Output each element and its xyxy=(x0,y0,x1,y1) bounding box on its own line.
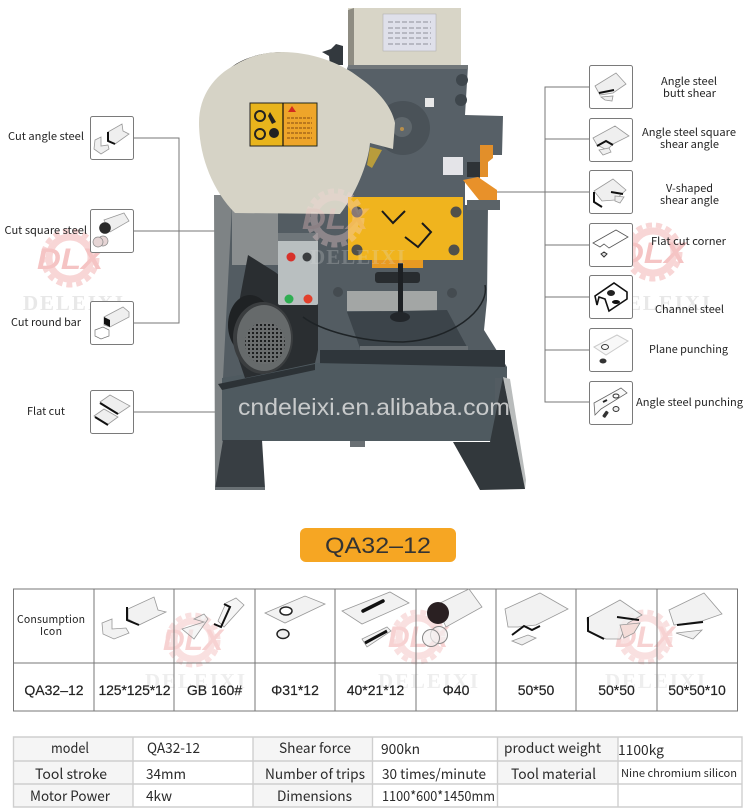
left labels: Cut round bar xyxy=(11,315,82,330)
spec row 1: model xyxy=(51,738,89,758)
right icon: flat cut corner xyxy=(590,224,632,266)
watermark: logo center xyxy=(302,191,370,245)
machine: control box xyxy=(278,233,318,305)
machine: top cover box xyxy=(348,8,461,65)
right icon: angle steel butt shear xyxy=(590,66,632,108)
table icon: V cut xyxy=(587,600,642,639)
machine: base box xyxy=(222,363,507,441)
machine: flywheel flange xyxy=(376,101,430,155)
spec row 2 xyxy=(35,764,737,784)
machine: yellow shear plate xyxy=(348,197,463,268)
spec row 1: Shear force xyxy=(279,738,351,758)
table icon: round bar xyxy=(422,589,482,646)
machine: left foot xyxy=(215,440,265,489)
model badge xyxy=(300,528,456,562)
table values: 50*50 xyxy=(598,682,635,698)
watermark: brand text left: DELEIXI xyxy=(23,291,123,315)
spec row 1: 900kn xyxy=(381,739,420,759)
left icon: cut round bar xyxy=(90,302,134,344)
machine: side guard below disc xyxy=(232,205,278,265)
model badge: QA32–12 xyxy=(325,533,431,558)
table values: Φ31*12 xyxy=(271,682,319,698)
table icon: plate round punch xyxy=(265,596,325,638)
right labels: Angle steel punching xyxy=(636,395,743,410)
machine: punch clamp and rod xyxy=(375,263,420,322)
table icon: angle steel xyxy=(102,597,166,639)
spec row 2: Tool stroke xyxy=(35,764,107,784)
table watermarks: DLX xyxy=(163,624,225,657)
machine: bolts and stickers xyxy=(425,74,468,175)
table values: GB 160# xyxy=(187,682,242,698)
watermark: logo left xyxy=(37,231,105,285)
table header label: Consumption xyxy=(17,612,85,627)
machine: power cable xyxy=(303,285,485,342)
left labels: Cut square steel xyxy=(4,223,87,238)
left labels: Flat cut xyxy=(27,404,65,419)
left icon: flat cut xyxy=(90,390,134,434)
right labels: Angle steel xyxy=(661,74,717,89)
table icon: slot punch xyxy=(342,592,409,647)
right labels: shear angle xyxy=(660,193,719,208)
machine: oil cup xyxy=(322,44,343,65)
table values: 40*21*12 xyxy=(347,682,405,698)
left labels xyxy=(4,129,87,419)
left icon: cut square steel xyxy=(90,210,134,252)
right icon: channel steel xyxy=(590,276,632,318)
table watermarks: DELEIXI xyxy=(378,669,478,693)
right labels: V-shaped xyxy=(666,181,713,196)
spec row 1 xyxy=(51,738,664,760)
right labels xyxy=(636,74,743,410)
spec row 3: 4kw xyxy=(146,786,172,806)
table icon: angle square cut xyxy=(505,593,568,645)
watermark: logo center: DLX xyxy=(302,203,370,236)
right labels: Angle steel square xyxy=(642,125,736,140)
right labels: Plane punching xyxy=(649,342,728,357)
spec row 3: Motor Power xyxy=(30,786,111,806)
right labels: shear angle xyxy=(660,137,719,152)
watermark: logo left: DLX xyxy=(37,243,105,276)
table watermarks: DLX xyxy=(388,621,450,654)
table values xyxy=(24,682,726,698)
consumption table: Icon xyxy=(40,624,62,639)
spec row 3: 1100*600*1450mm xyxy=(382,786,495,806)
connector lines xyxy=(133,87,589,412)
photo watermark url: cndeleixi.en.alibaba.com xyxy=(238,394,510,420)
watermark: brand text center: DELEIXI xyxy=(310,245,405,269)
watermark: logo right: DLX xyxy=(620,237,688,270)
machine: guard disc xyxy=(199,52,395,214)
table icon: butt cut xyxy=(669,593,722,639)
right icon: angle steel square shear angle xyxy=(590,118,632,162)
spec row 3: Dimensions xyxy=(277,786,352,806)
right icon: plane punching xyxy=(590,328,632,372)
right labels: Flat cut corner xyxy=(651,234,727,249)
machine: gear teeth xyxy=(367,147,382,168)
table values: 50*50*10 xyxy=(668,682,726,698)
spec row 2: 34mm xyxy=(146,764,186,784)
watermark: brand text right: DELEIXI xyxy=(610,291,710,315)
table watermarks: DLX xyxy=(615,621,677,654)
spec row 2: Tool material xyxy=(511,764,596,784)
left icon: cut angle steel xyxy=(90,116,134,160)
spec row 1: 1100kg xyxy=(618,740,664,760)
watermark: logo right xyxy=(620,225,688,279)
machine: die area xyxy=(320,287,505,367)
table values: 50*50 xyxy=(518,682,555,698)
spec row 3 xyxy=(30,786,495,806)
table values: QA32–12 xyxy=(24,682,84,698)
table values: 125*125*12 xyxy=(98,682,171,698)
spec row 2: 30 times/minute xyxy=(382,764,486,784)
spec row 2: Nine chromium silicon xyxy=(621,765,737,781)
machine: right foot xyxy=(453,377,525,490)
consumption table xyxy=(14,589,738,711)
table values: Φ40 xyxy=(443,682,470,698)
table watermarks: DELEIXI xyxy=(145,669,245,693)
machine: left side plate xyxy=(214,195,232,489)
table watermarks: DELEIXI xyxy=(605,669,705,693)
table icon: GB 160 xyxy=(182,598,244,639)
spec row 2: Number of trips xyxy=(265,764,365,784)
spec row 1: QA32-12 xyxy=(147,738,200,758)
machine: upper body xyxy=(300,66,503,210)
left labels: Cut angle steel xyxy=(8,129,84,144)
machine: orange tool holder xyxy=(463,145,500,210)
right labels: butt shear xyxy=(663,86,717,101)
right icon: V-shaped shear angle xyxy=(590,170,632,214)
machine illustration xyxy=(199,8,526,490)
machine: column body xyxy=(223,205,507,440)
right icon: angle steel punching xyxy=(590,382,632,424)
table watermarks xyxy=(145,612,705,693)
machine: motor xyxy=(228,255,318,378)
specification table xyxy=(14,737,742,807)
spec row 1: product weight xyxy=(504,738,602,758)
right labels: Channel steel xyxy=(655,302,724,317)
